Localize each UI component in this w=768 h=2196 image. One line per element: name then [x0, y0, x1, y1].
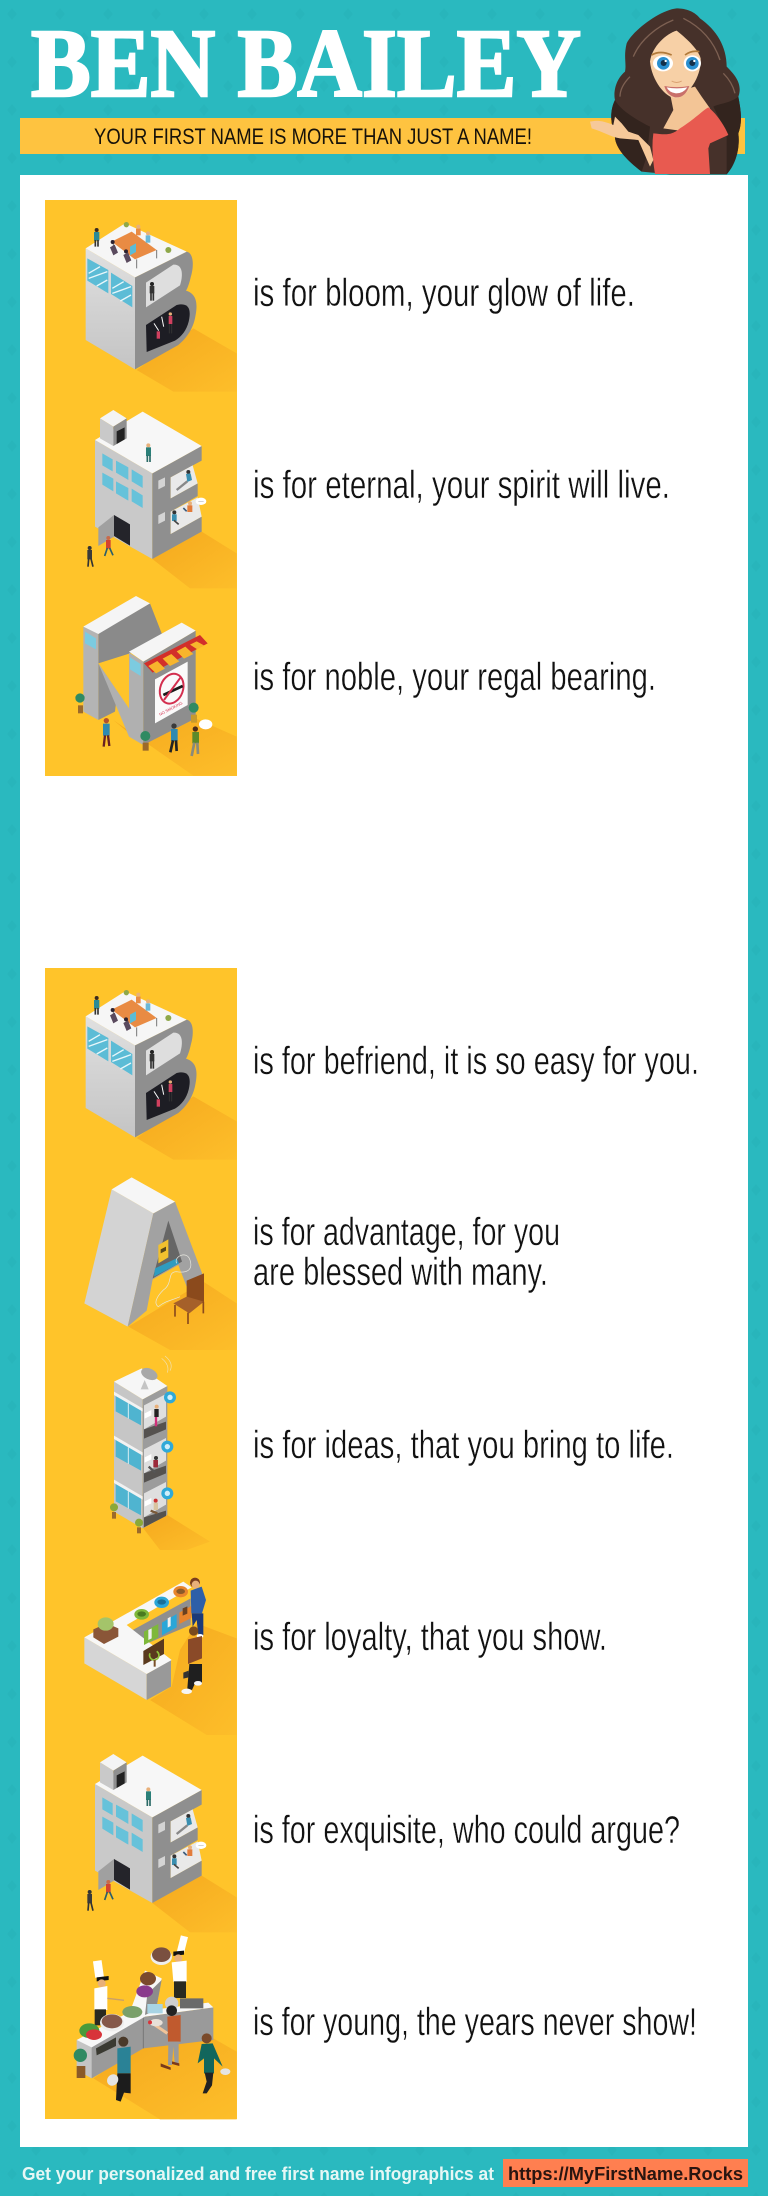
- text: L is for loyalty: is for loyalty, that you show.: [253, 1616, 607, 1659]
- character: woman presenting: [590, 8, 741, 174]
- text: A is for advantage: [253, 1211, 560, 1294]
- tagline banner: [20, 118, 745, 154]
- icon: letter B building (last name): [86, 990, 237, 1160]
- icon: letter N building: [75, 596, 237, 776]
- icon: letter N building: NO SMOKING: [158, 700, 183, 717]
- icon: letter E building (last name): [87, 1754, 237, 1932]
- text: B is for bloom: is for bloom, your glow of life.: [253, 272, 635, 315]
- text: A is for advantage: is for advantage, for you: [253, 1211, 560, 1254]
- text: A is for advantage: are blessed with many.: [253, 1251, 548, 1294]
- icon: letter E building: [87, 410, 237, 588]
- footer call to action: Get your personalized and free first name infographics at: [22, 2164, 494, 2184]
- icon: letter I building: [110, 1356, 210, 1550]
- panel: last name column: [45, 968, 237, 2119]
- tagline banner: YOUR FIRST NAME IS MORE THAN JUST A NAME!: [94, 124, 532, 149]
- icon: letter Y buffet counter: [74, 1935, 237, 2119]
- panel: first name column: [45, 200, 237, 776]
- title: BEN BAILEY: [31, 10, 581, 118]
- footer URL badge: https://MyFirstName.Rocks: [508, 2164, 743, 2184]
- icon: letter B building: [86, 222, 237, 392]
- icon: letter L recycling station: [84, 1578, 237, 1735]
- icon: letter A building: [84, 1177, 237, 1350]
- footer URL badge: [503, 2159, 748, 2187]
